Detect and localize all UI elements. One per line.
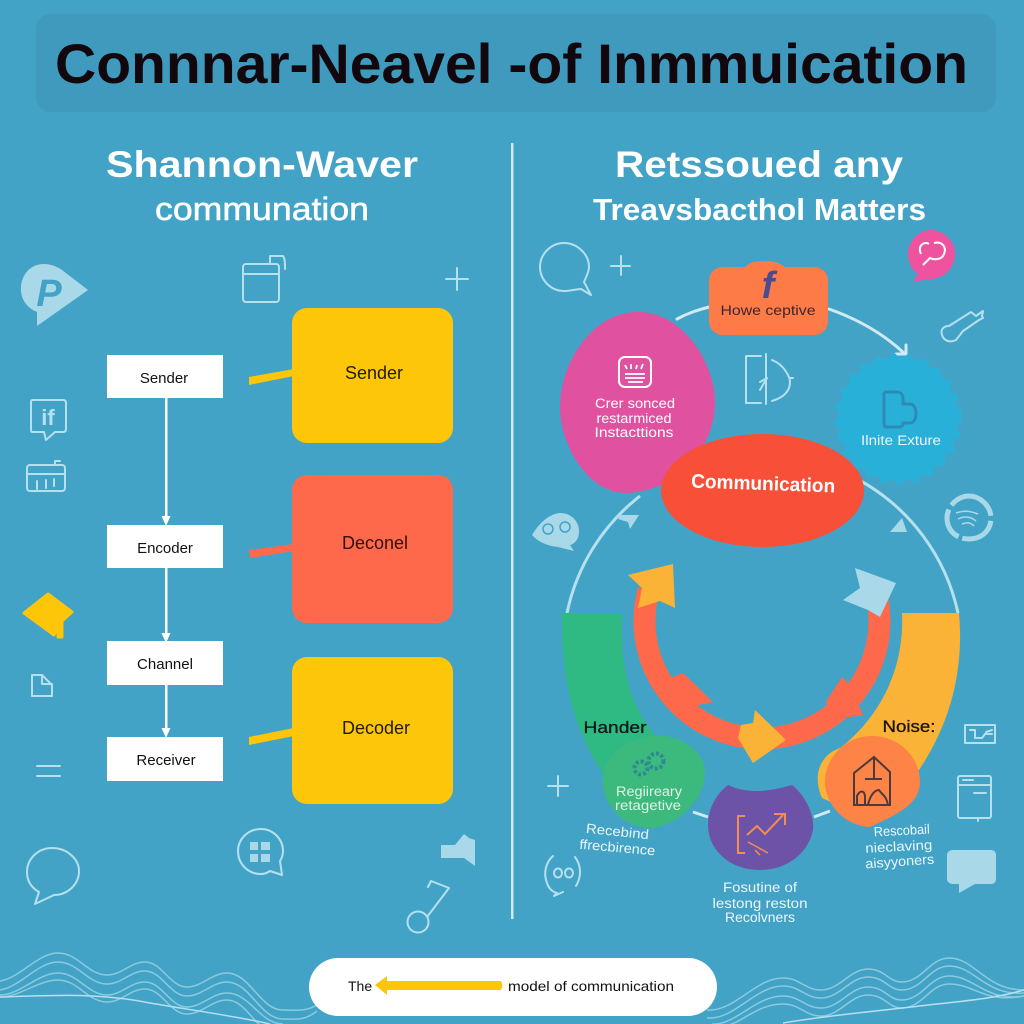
green circle: regiery: retagetive [615, 798, 681, 813]
callout: decoder [249, 657, 453, 804]
icon: plus lower left [548, 776, 568, 796]
footer pill [309, 958, 717, 1016]
icon: browser window [958, 776, 991, 821]
arrowhead: yellow top [628, 564, 675, 608]
green circle: regiery [603, 736, 705, 828]
icon: speech bubble right top [540, 243, 591, 295]
decorative waves left [0, 953, 317, 1024]
caption: rescohail: aisyyoners [865, 852, 935, 871]
flow box: encoder: Encoder [137, 540, 193, 557]
flow box: sender [107, 355, 223, 398]
caption: rescohail: nieclaving [865, 837, 933, 856]
title banner [36, 14, 996, 112]
footer pill: model of communication [508, 978, 674, 994]
icon: grid bubble [238, 829, 283, 875]
icon: equals [37, 766, 60, 776]
pink bubble panel: Instacttions [594, 425, 674, 440]
callout: sender [249, 308, 453, 443]
caption: fosutine [712, 880, 808, 925]
feedback ring [644, 590, 879, 738]
flow box: receiver [107, 737, 223, 781]
green band [562, 613, 700, 815]
label: noise: Noise: [882, 717, 936, 736]
connectors to purple [693, 811, 830, 817]
callout: deconel: Deconel [342, 533, 408, 553]
pink bubble panel: restarmiced [596, 411, 672, 426]
flow box: encoder [107, 525, 223, 568]
caption: rescohail [865, 822, 935, 871]
pink bubble panel: Crer sonced [595, 396, 675, 411]
icon: image panel [965, 725, 995, 743]
caption: recebind: Recebind [585, 821, 650, 842]
blue badge panel [838, 357, 958, 481]
pink bubble panel [560, 312, 715, 493]
caption: fosutine: Fosutine of [723, 880, 797, 895]
icon: plus right top [611, 256, 630, 275]
icon: headset [408, 881, 449, 932]
icon: light chat box [947, 850, 996, 893]
arrowhead: yellow bottom [738, 710, 786, 763]
icon: speech bubble lower left [27, 848, 79, 904]
left heading [106, 144, 418, 227]
orange circle panel [825, 736, 920, 827]
icon: small arrow left [618, 515, 639, 529]
yellow band [818, 613, 960, 806]
icon: pink bubble [908, 230, 955, 282]
purple panel [708, 785, 813, 870]
flow box: channel [107, 641, 223, 685]
icon: pinterest bubble [21, 264, 88, 326]
left heading: Shannon-Waver [106, 144, 418, 185]
central ellipse: Communication [691, 470, 836, 498]
icon: yellow diamond [24, 594, 72, 637]
caption: fosutine: lestong reston [712, 896, 808, 911]
caption: rescohail: Rescobail [873, 822, 930, 839]
callout: deconel [249, 475, 453, 623]
icon: facebook bubble: if [41, 405, 55, 430]
flow box: receiver: Receiver [136, 752, 196, 769]
icon: window [243, 256, 285, 302]
right heading [593, 144, 926, 227]
green circle: regiery: Regiireary [616, 784, 682, 799]
caption: recebind [579, 821, 656, 858]
icon: small arrow right [890, 518, 907, 532]
icon: document [32, 675, 52, 696]
icon: wrench [941, 311, 983, 341]
flow arrows [162, 398, 170, 738]
right heading: Retssoued any [615, 144, 903, 185]
caption: fosutine: Recolvners [725, 910, 795, 925]
right heading: Treavsbacthol Matters [593, 192, 926, 227]
footer pill: The [348, 978, 372, 994]
orange box panel: f [762, 265, 778, 307]
central ellipse [661, 434, 864, 547]
caption: recebind: ffrecbirence [579, 837, 656, 858]
icon: circular refresh [947, 496, 991, 539]
left heading: communation [155, 191, 369, 227]
icon: plus left [446, 268, 468, 290]
orange box panel [709, 261, 828, 335]
icon: calendar [27, 461, 65, 491]
callout: decoder: Decoder [342, 718, 410, 738]
icon: face bubble [545, 856, 580, 896]
icon: half gear [746, 354, 793, 404]
orange box panel: Howe ceptive [720, 302, 816, 318]
icon: eyes bubble [532, 513, 579, 551]
callout: sender: Sender [345, 363, 403, 383]
label: hander: Hander [584, 718, 647, 737]
top arc with arrow [677, 307, 906, 354]
outer thin ring [567, 480, 958, 613]
decorative waves right [707, 958, 1024, 1024]
icon: facebook bubble [31, 400, 66, 440]
flow box: channel: Channel [137, 656, 193, 673]
icon: megaphone [441, 834, 475, 866]
center divider [511, 143, 514, 919]
icon: pinterest bubble: P [36, 273, 62, 315]
flow box: sender: Sender [140, 370, 188, 387]
arrowhead: light blue [843, 568, 896, 617]
blue badge panel: Ilnite Exture [861, 433, 941, 448]
title banner: Connnar-Neavel -of Inmmuication [55, 32, 968, 95]
